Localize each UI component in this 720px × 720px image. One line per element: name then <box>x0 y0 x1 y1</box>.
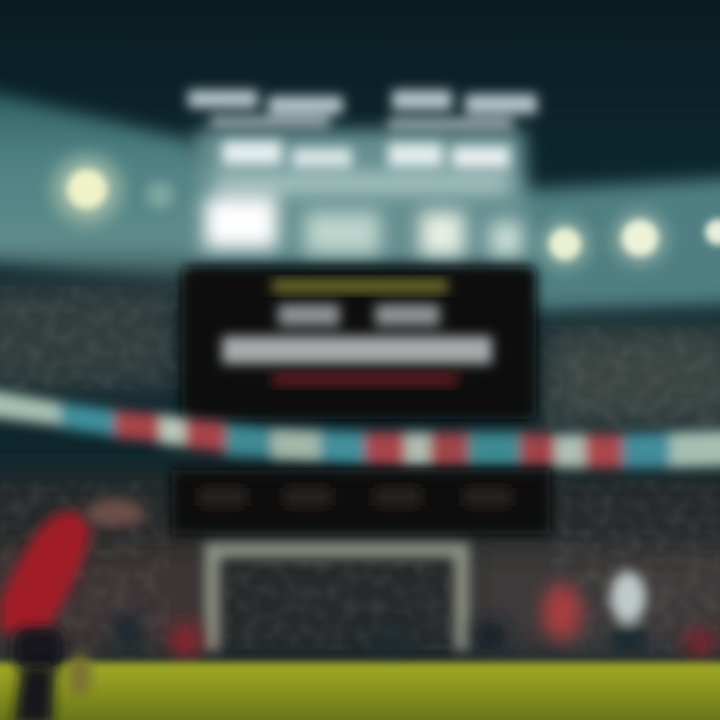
lower dark board <box>172 470 550 534</box>
scoreboard main text <box>222 304 492 364</box>
crowd colour accents <box>114 584 716 658</box>
background player in white <box>610 571 646 655</box>
stadium roof band <box>0 90 720 312</box>
scoreboard yellow heading <box>272 279 448 293</box>
scoreboard red line <box>272 372 458 386</box>
pitch <box>0 662 720 720</box>
scoreboard panel <box>182 267 536 419</box>
foreground player in red <box>0 499 145 720</box>
crowd stands <box>0 282 720 660</box>
upper title block glow <box>205 172 522 256</box>
floodlights <box>53 155 720 268</box>
bunting banner <box>0 388 720 468</box>
blurred heading text <box>188 90 537 168</box>
goal frame <box>212 550 462 650</box>
crowd texture <box>0 285 720 655</box>
